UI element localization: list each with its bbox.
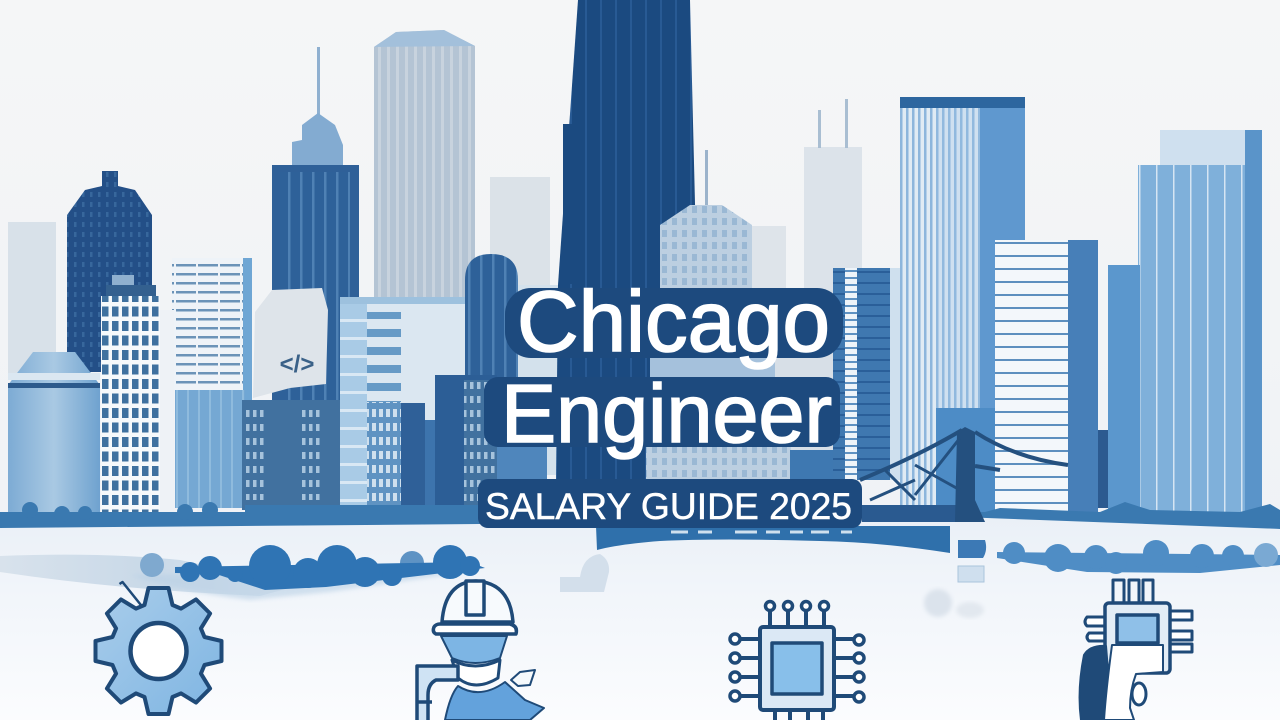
bridge deck lights — [671, 530, 852, 534]
building: lower grid block — [242, 400, 345, 510]
icon: hand holding chip — [1080, 580, 1192, 720]
building: striped blue tower — [833, 268, 900, 480]
building: white grid tower — [101, 275, 174, 518]
building: central navy tower — [556, 0, 697, 480]
trees: left bank — [140, 545, 485, 590]
trees: right bank — [997, 540, 1280, 574]
river and foreground ground — [0, 517, 1280, 720]
building: domed mid tower — [435, 254, 547, 510]
building: spire tower — [272, 47, 359, 405]
icon: engineer with hard hat — [417, 581, 544, 720]
building: right tall tower — [900, 97, 1025, 512]
title: Engineer: Engineer — [501, 367, 832, 460]
building: code tower — [253, 288, 328, 398]
building: white striped tower — [995, 240, 1098, 518]
building: centre pale block — [646, 150, 835, 480]
skyline: far pale buildings — [8, 99, 862, 475]
building: pale mid block — [340, 297, 465, 510]
icon: microchip — [730, 602, 864, 720]
title: Chicago: Chicago — [517, 274, 830, 370]
building: dark left tower — [67, 171, 152, 372]
building: far right tower — [1098, 130, 1262, 515]
building: low dome left — [8, 352, 100, 515]
building: tall light tower — [374, 30, 475, 305]
bridge — [560, 427, 1068, 618]
haze band left bank — [0, 555, 480, 600]
icon: gear — [96, 582, 222, 714]
shoreline — [0, 502, 1280, 529]
subtitle: salary guide: SALARY GUIDE 2025 — [485, 486, 852, 527]
code symbol: </> — [280, 351, 314, 378]
building: text-panel tower — [172, 258, 252, 508]
